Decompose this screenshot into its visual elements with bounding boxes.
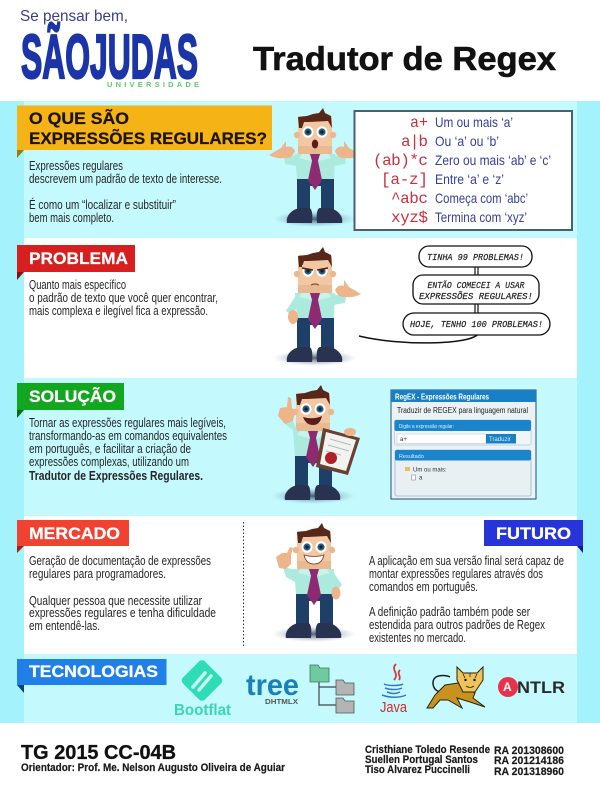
text: mercado: Geração de documentação de expressões [29, 554, 211, 568]
heading: tecnologias: TECNOLOGIAS [29, 663, 158, 681]
logo: tree DHTMLX: tree [246, 669, 299, 702]
screenshot: aplicação RegEX: Digite a expressão regular: [399, 424, 454, 430]
text: definição: É como um “localizar e substituir” [29, 197, 176, 212]
text: futuro [369, 554, 564, 645]
screenshot: aplicação RegEX [391, 390, 536, 499]
heading: o que são: EXPRESSÕES REGULARES? [29, 128, 267, 148]
text: solução: em português, e facilitar a criação de [29, 442, 191, 456]
regex table: ^abc [391, 190, 428, 208]
text: definição: bem mais completo. [29, 211, 114, 225]
logo: São Judas: UNIVERSIDADE [107, 80, 199, 89]
authors: Tiso Alvarez Puccinelli [365, 764, 470, 776]
project code: TG 2015 CC-04B [21, 742, 176, 764]
character: surpreso [269, 108, 361, 227]
speech bubbles: HOJE, TENHO 100 PROBLEMAS! [410, 319, 543, 330]
logo: Java: Java [380, 699, 408, 716]
regex table: [a-z] [381, 171, 428, 189]
heading: solução [17, 383, 124, 418]
text: mercado: Qualquer pessoa que necessite utilizar [29, 594, 202, 608]
logo: tree DHTMLX: DHTMLX [265, 697, 298, 706]
logo: Java [380, 664, 408, 716]
panel: mercado e futuro [17, 516, 583, 654]
regex table: xyz$ [391, 209, 428, 227]
text: problema [29, 278, 218, 318]
text: solução [29, 416, 227, 483]
panel: solução [17, 378, 577, 516]
heading: mercado: MERCADO [29, 525, 120, 543]
screenshot: aplicação RegEX: Traduzir de REGEX para linguagem natural [397, 406, 528, 415]
screenshot: aplicação RegEX: a+ [400, 437, 407, 443]
authors: RA 201214186 [494, 755, 564, 767]
text: solução: Tornar as expressões regulares mais legíveis, [29, 416, 226, 430]
speech bubbles [359, 246, 550, 343]
speech bubbles: EXPRESSÕES REGULARES! [419, 291, 533, 302]
text: problema: Quanto mais específico [29, 278, 126, 292]
authors: Cristhiane Toledo Resende [365, 744, 490, 756]
screenshot: aplicação RegEX: RegEX - Expressões Regulares [395, 392, 489, 402]
text: futuro: A definição padrão também pode ser [369, 605, 530, 619]
text: futuro: montar expressões regulares através dos [369, 567, 543, 581]
regex table: Começa com ‘abc’ [435, 190, 528, 206]
text: definição: descrevem um padrão de texto de interesse. [29, 172, 222, 186]
regex table: Termina com ‘xyz’ [435, 209, 527, 225]
panel: problema [17, 238, 577, 378]
authors: RA 201308600 [494, 745, 564, 757]
regex table: a+ [410, 114, 428, 132]
footer [0, 723, 600, 800]
regex table: (ab)*c [373, 152, 428, 170]
text: definição: Expressões regulares [29, 159, 123, 173]
panel: tecnologias [17, 654, 577, 723]
icon: tree of folders [310, 665, 354, 713]
logo: Bootflat [174, 659, 232, 719]
authors [365, 744, 564, 778]
text: solução: Tradutor de Expressões Regulares. [29, 469, 203, 483]
text: definição [29, 159, 222, 225]
regex table: Zero ou mais ‘ab’ e ‘c’ [435, 152, 551, 168]
text: futuro: comandos em português. [369, 580, 478, 594]
text: futuro: estendida para outros padrões de Regex [369, 618, 546, 632]
text: solução: expressões complexas, utilizando um [29, 455, 189, 469]
heading: futuro [484, 520, 583, 553]
text: mercado: expressões regulares e tenha dificuldade [29, 606, 216, 620]
heading: o que são [17, 106, 272, 158]
text: mercado: regulares para programadores. [29, 567, 166, 581]
text: futuro: existentes no mercado. [369, 631, 466, 645]
logo: ANTLR: NTLR [517, 678, 565, 697]
text: solução: transformando-as em comandos equivalentes [29, 429, 227, 443]
screenshot: aplicação RegEX: a [419, 476, 423, 482]
logo: São Judas [21, 23, 199, 92]
logo: Bootflat: Bootflat [174, 702, 232, 719]
regex table: a|b [401, 133, 428, 151]
advisor: Orientador: Prof. Me. Nelson Augusto Oliveira de Aguiar [21, 762, 286, 774]
title: Tradutor de Regex [253, 40, 557, 77]
header [0, 0, 600, 101]
logo: ANTLR: A [503, 680, 512, 694]
heading: o que são: O QUE SÃO [29, 108, 129, 128]
regex table [354, 111, 572, 230]
regex table: Entre ‘a’ e ‘z’ [435, 171, 504, 187]
text: problema: mais complexa e ilegível fica a expressão. [29, 304, 208, 318]
screenshot: aplicação RegEX: Traduzir [489, 437, 511, 443]
character: polegar para cima [272, 523, 356, 642]
regex table: Ou ‘a’ ou ‘b’ [435, 133, 499, 149]
heading: problema: PROBLEMA [29, 250, 128, 268]
regex table: Um ou mais ‘a’ [435, 114, 513, 130]
heading: tecnologias [17, 659, 166, 693]
heading: mercado [17, 520, 129, 553]
panel: o que são [17, 101, 577, 238]
speech bubbles: TINHA 99 PROBLEMAS! [427, 252, 524, 263]
tagline: Se pensar bem, [20, 8, 128, 25]
character: confuso [273, 247, 361, 366]
heading: problema [17, 245, 135, 280]
text: problema: o padrão de texto que você quer encontrar, [29, 291, 218, 305]
logo: ANTLR [498, 677, 565, 697]
character: com certificado [271, 385, 360, 504]
side background strips [0, 101, 600, 723]
logo: São Judas: SÃOJUDAS [21, 23, 198, 92]
speech bubbles: ENTÃO COMECEI A USAR [428, 280, 525, 291]
text: mercado [29, 554, 216, 633]
text: mercado: em entendê-las. [29, 619, 100, 633]
logo: Tomcat [427, 667, 485, 708]
screenshot: aplicação RegEX: Um ou mais: [413, 468, 447, 474]
authors: RA 201318960 [494, 766, 564, 778]
heading: futuro: FUTURO [496, 525, 571, 543]
screenshot: aplicação RegEX: Resultado [399, 454, 424, 460]
heading: solução: SOLUÇÃO [29, 386, 116, 406]
authors: Suellen Portugal Santos [365, 754, 478, 766]
